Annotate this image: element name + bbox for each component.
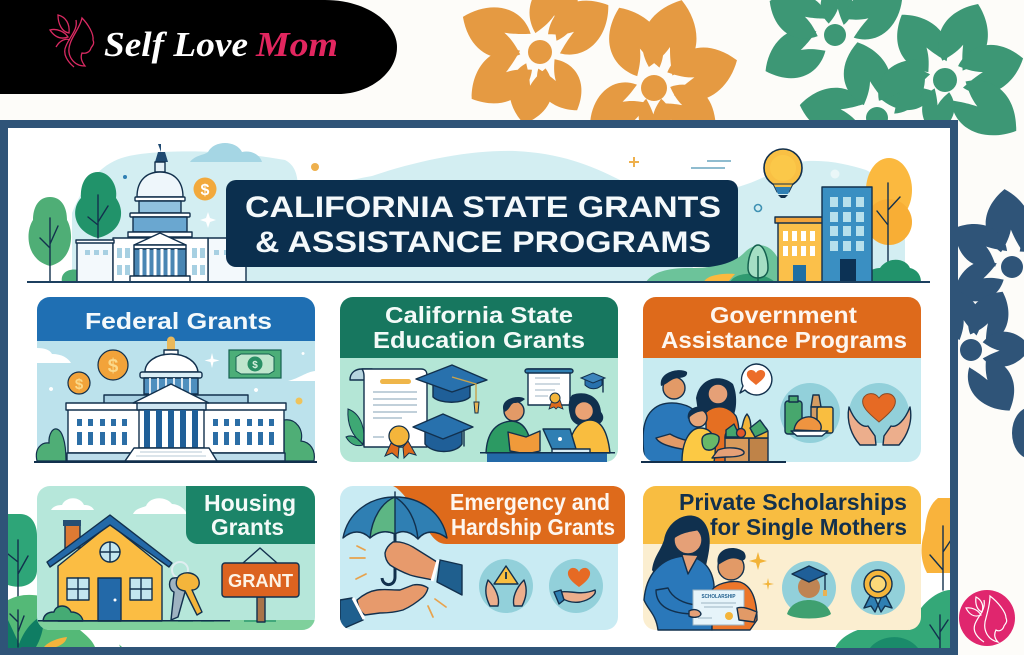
heading: Government: [710, 302, 857, 328]
left tree and foliage: [8, 514, 122, 650]
icon: upper hand: [385, 542, 462, 595]
heading: [661, 302, 907, 353]
header logo pill: [0, 0, 397, 94]
light bulb icon: [764, 149, 802, 198]
icon: house: [43, 515, 172, 621]
clouds: [51, 498, 186, 514]
icon: speech bubble with heart: [740, 364, 772, 395]
dome: [128, 144, 192, 237]
father: [643, 370, 698, 461]
icon: hands with heart: [848, 383, 911, 445]
office buildings: [775, 187, 872, 282]
panel: housing grants: [37, 486, 315, 630]
ground line: [641, 461, 786, 463]
heading: [373, 302, 585, 353]
panel: emergency and hardship grants: [340, 486, 625, 630]
sign: grant: [222, 548, 299, 622]
mother: [696, 378, 739, 462]
logo wordmark: Self Love: [104, 25, 248, 64]
hero banner scene: [27, 143, 930, 283]
desk: [487, 453, 607, 462]
icon: banknote: [229, 350, 281, 378]
heading: Private Scholarships: [679, 489, 907, 515]
dome: [140, 336, 202, 394]
mother: [644, 516, 714, 630]
icon: banknote: $: [252, 360, 258, 371]
background hills: [72, 151, 905, 282]
right tree and foliage: [835, 498, 951, 648]
windows left: [77, 419, 274, 445]
logo wordmark: Mom: [255, 25, 338, 64]
heading: Emergency and: [450, 489, 610, 515]
capitol building, hero: [76, 144, 246, 282]
infographic frame: [4, 124, 954, 651]
laptop: [543, 429, 590, 453]
icon: coins: $: [108, 356, 119, 377]
capitol building: [66, 336, 286, 461]
icon: award ribbon: [851, 561, 905, 615]
ground line: [27, 281, 930, 283]
heading: Housing: [204, 490, 296, 516]
heading: Federal Grants: [85, 308, 272, 334]
title box: CALIFORNIA STATE GRANTS: [245, 191, 721, 224]
icon: coins: [68, 350, 128, 394]
mother and son: [644, 516, 757, 630]
sign: grant: GRANT: [228, 571, 293, 591]
open book: [508, 431, 540, 454]
icon: keys: [170, 562, 276, 621]
portico: [130, 233, 190, 282]
decorative flowers: navy: [935, 188, 1024, 459]
portico: [125, 384, 217, 461]
child: [682, 406, 719, 462]
orange heading tab: [393, 486, 625, 544]
girl: [569, 393, 610, 453]
accent dot: [296, 398, 302, 404]
title box: [226, 180, 738, 267]
students at desk: [480, 393, 615, 462]
heading: [450, 489, 615, 540]
ground line: [34, 461, 317, 463]
icon: coins: $: [75, 376, 84, 393]
heading: [204, 490, 296, 540]
heading: Assistance Programs: [661, 327, 907, 353]
rays: [350, 546, 446, 617]
grocery box: [712, 414, 768, 463]
coin icon: [194, 178, 216, 200]
ground line: [38, 620, 230, 622]
scholarship certificate: SCHOLARSHIP: [702, 594, 736, 600]
small dots and sparkles: [123, 157, 840, 228]
icon: hand with heart: [549, 559, 603, 613]
logo badge: [959, 590, 1015, 646]
icon: certificate on wall: [525, 369, 573, 409]
panel: private scholarships: [643, 486, 921, 630]
left trees: [29, 172, 121, 282]
icon: lower hand: [340, 585, 428, 630]
icon: small cap: [581, 373, 605, 392]
sparkles: [749, 552, 774, 590]
icon: hands with warning: [479, 559, 533, 613]
heading: Hardship Grants: [451, 514, 615, 540]
bushes: [36, 420, 314, 461]
logo icon: [50, 15, 94, 67]
icon: graduate: [782, 561, 836, 618]
icon: leaf: [346, 409, 364, 446]
logo wordmark: [104, 25, 338, 64]
heading: Education Grants: [373, 327, 585, 353]
family illustration: [643, 370, 768, 463]
right side trees and bushes: [646, 158, 921, 282]
icon: umbrella: [343, 492, 447, 585]
sparkles: [49, 352, 305, 392]
windows: [85, 248, 239, 275]
cloud: [190, 143, 262, 162]
icon: diploma: [350, 369, 427, 458]
heading: for Single Mothers: [710, 514, 907, 540]
coin icon: $: [201, 182, 210, 199]
panel: government assistance programs: [641, 297, 921, 463]
panel: california state education grants: [340, 297, 618, 462]
icon: food circle: [780, 383, 840, 443]
heading: Grants: [211, 514, 284, 540]
title box: & ASSISTANCE PROGRAMS: [255, 226, 711, 259]
icon: graduation caps: [413, 365, 487, 452]
son: [712, 548, 757, 630]
panel: federal grants: [34, 297, 317, 463]
decorative flowers: green: [755, 0, 1024, 153]
heading: [679, 489, 907, 540]
boy: [486, 397, 532, 453]
heading: California State: [385, 302, 573, 328]
decorative flowers: orange: [453, 0, 745, 143]
